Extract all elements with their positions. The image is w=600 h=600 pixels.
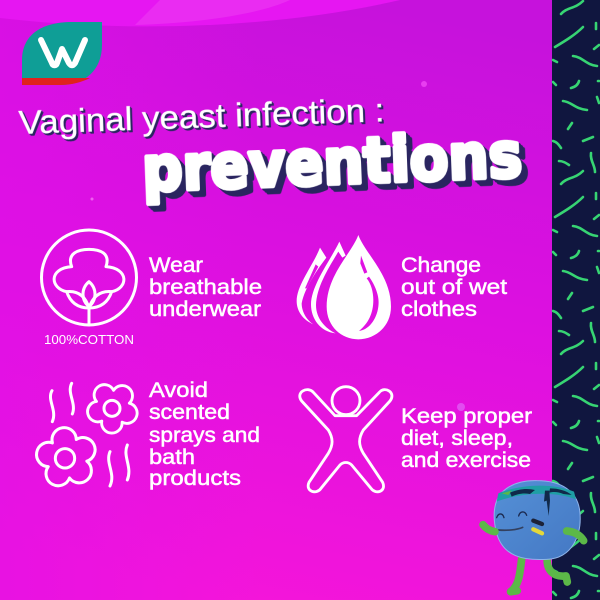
icon: flowers and scent: [32, 378, 141, 491]
text: avoid scented sprays and bath products: products: [149, 466, 241, 490]
label: 100% cotton: 100%COTTON: [44, 333, 134, 347]
text: wear breathable underwear: [149, 253, 262, 321]
icon: water drops: [297, 235, 391, 339]
text: change out of wet clothes: [401, 253, 507, 321]
text: avoid scented sprays and bath products: Avoid: [149, 378, 208, 402]
side strip with green squiggles: [552, 0, 600, 600]
text: keep proper diet, sleep, and exercise: diet, sleep,: [401, 426, 513, 450]
text: change out of wet clothes: Change: [401, 253, 481, 277]
text: avoid scented sprays and bath products: sprays and: [149, 423, 260, 447]
title: preventions: preventions: [141, 118, 523, 206]
text: keep proper diet, sleep, and exercise: [401, 404, 532, 472]
text: change out of wet clothes: out of wet: [401, 275, 507, 299]
text: avoid scented sprays and bath products: [149, 378, 260, 490]
text: avoid scented sprays and bath products: bath: [149, 445, 195, 469]
text: keep proper diet, sleep, and exercise: Keep proper: [401, 404, 532, 428]
text: avoid scented sprays and bath products: scented: [149, 400, 230, 424]
text: wear breathable underwear: Wear: [149, 253, 203, 277]
text: wear breathable underwear: underwear: [149, 297, 261, 321]
text: wear breathable underwear: breathable: [149, 275, 262, 299]
icon: person exercising: [300, 387, 392, 492]
text: change out of wet clothes: clothes: [401, 297, 477, 321]
logo: [22, 22, 102, 85]
title line: Vaginal yeast infection :: [18, 91, 385, 141]
icon: cotton: [42, 230, 136, 325]
text: keep proper diet, sleep, and exercise: and exercise: [401, 448, 531, 472]
mascot: [483, 481, 584, 592]
